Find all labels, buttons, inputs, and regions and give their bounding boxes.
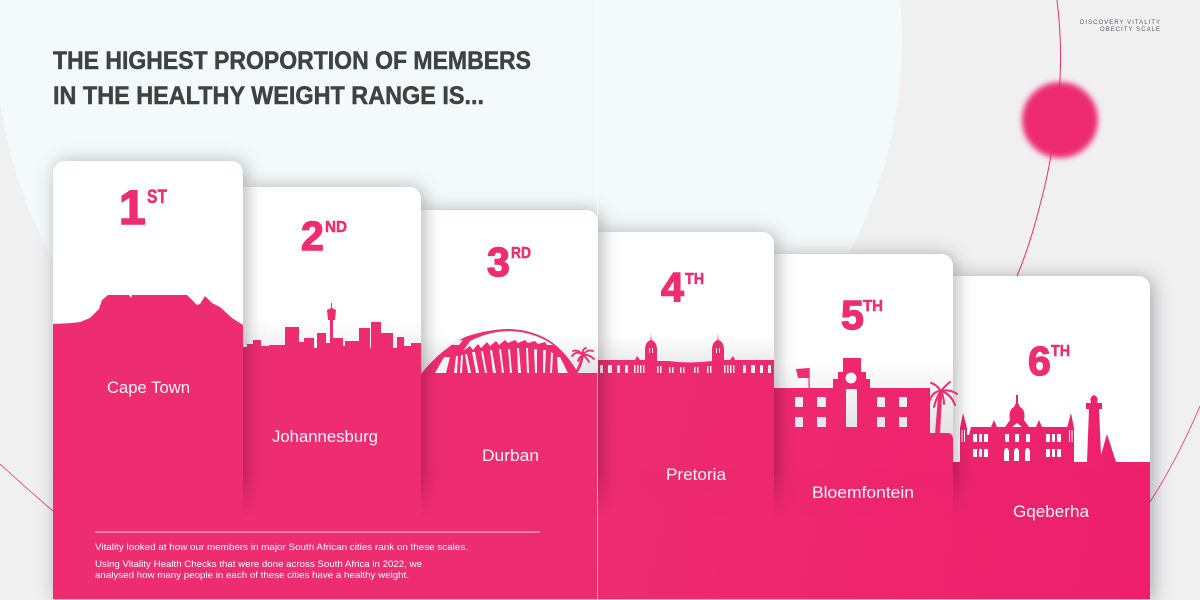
icon: palm tree — [930, 382, 957, 434]
rank: 5th: TH — [863, 298, 883, 315]
blurred pink sphere — [1022, 82, 1098, 158]
skyline: Gqeberha — [953, 395, 1150, 600]
pale background circle — [0, 0, 902, 493]
scale label: OBECITY SCALE — [1100, 27, 1160, 33]
skyline: Table Mountain — [53, 295, 243, 600]
city labels: Pretoria — [666, 465, 727, 484]
rank: 4th: TH — [685, 271, 704, 288]
footer text — [95, 542, 468, 581]
thin arc lower left — [0, 464, 53, 511]
city labels — [107, 378, 1090, 521]
rank: 1st — [119, 182, 167, 235]
card: 6th Gqeberha — [953, 276, 1150, 600]
rank: 5th — [841, 292, 883, 338]
city labels: Durban — [482, 446, 539, 465]
footer text: Vitality looked at how our members in major South African cities rank on these scales. — [95, 542, 468, 553]
scale label — [1080, 20, 1160, 33]
title: IN THE HEALTHY WEIGHT RANGE IS... — [53, 82, 484, 110]
rank: 3rd — [487, 239, 531, 285]
footer text: analysed how many people in each of these cities have a healthy weight. — [95, 570, 409, 581]
skyline: Bloemfontein — [774, 358, 957, 600]
rank: 2nd — [301, 213, 347, 259]
rank: 6th: 6 — [1028, 338, 1051, 384]
rank: 4th — [661, 264, 704, 310]
city labels: Cape Town — [107, 378, 190, 397]
skyline: Johannesburg — [243, 303, 421, 600]
skyline: Pretoria — [598, 333, 774, 600]
card: 4th Pretoria — [598, 222, 788, 515]
rank: 3rd: 3 — [487, 239, 510, 285]
rank: 1st: ST — [147, 187, 167, 208]
card: 3rd Durban — [421, 200, 612, 515]
title — [53, 47, 531, 110]
skyline: Durban stadium — [421, 329, 598, 600]
city labels: Gqeberha — [1013, 502, 1090, 521]
rank: 3rd: RD — [511, 245, 531, 262]
city labels: Bloemfontein — [812, 483, 914, 502]
rank: 2nd: 2 — [301, 213, 324, 259]
card: 2nd Johannesburg — [243, 178, 434, 515]
title: THE HIGHEST PROPORTION OF MEMBERS — [53, 47, 531, 75]
thin arc upper right — [1017, 0, 1061, 276]
footer panel — [53, 470, 1150, 600]
rank: 1st: 1 — [119, 182, 146, 235]
rank: 6th — [1028, 338, 1070, 384]
thin arc lower right — [1150, 406, 1200, 502]
rank: 6th: TH — [1051, 343, 1070, 360]
card: 5th Bloemfontein — [774, 244, 966, 515]
card: 1st Cape Town — [53, 161, 243, 600]
rank: 2nd: ND — [325, 219, 347, 236]
rank: 4th: 4 — [661, 264, 684, 310]
rank: 5th: 5 — [841, 292, 864, 338]
icon: palm tree — [572, 348, 594, 372]
scale label: DISCOVERY VITALITY — [1080, 20, 1160, 26]
city labels: Johannesburg — [272, 427, 378, 446]
footer text: Using Vitality Health Checks that were done across South Africa in 2022, we — [95, 559, 422, 570]
